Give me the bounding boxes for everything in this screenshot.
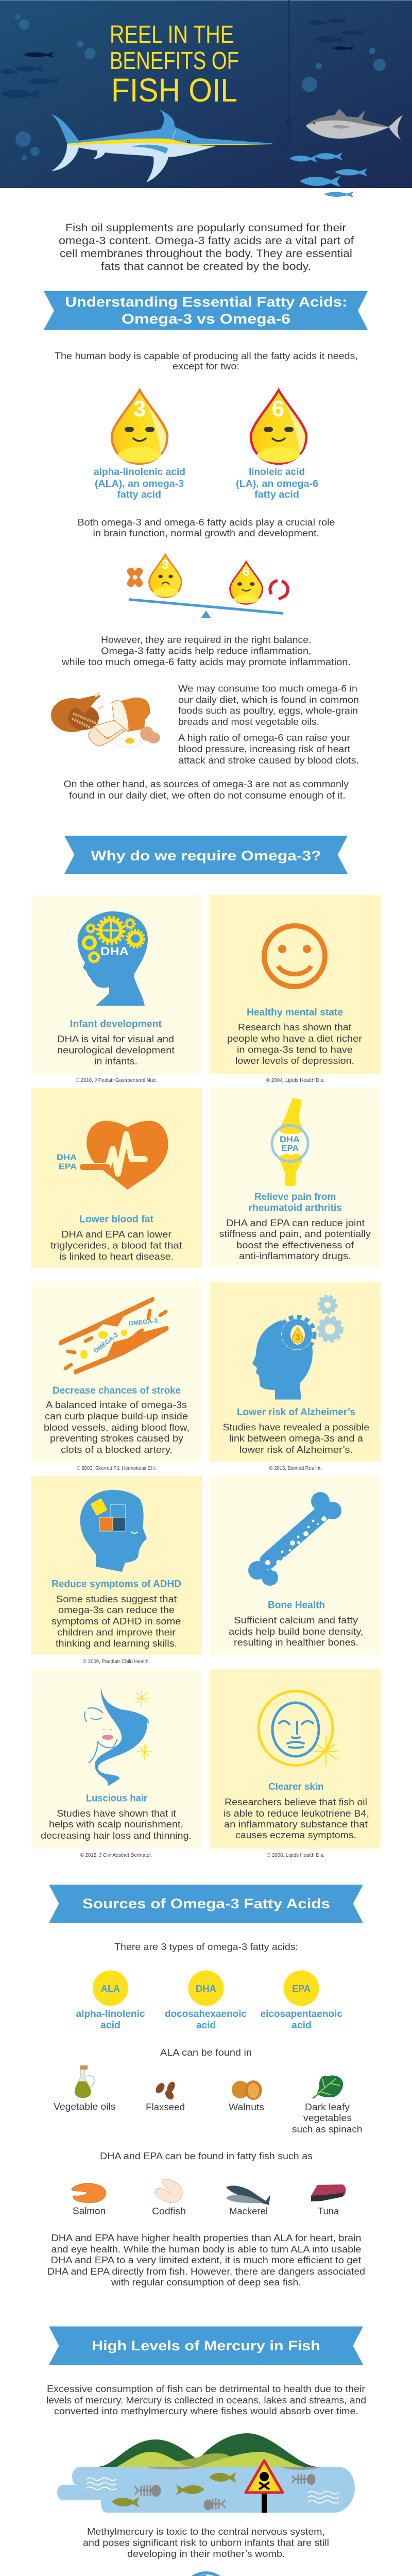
panel: infant development bbox=[31, 895, 202, 1074]
school of dark fish, left bbox=[0, 52, 60, 99]
card text: boost the effectiveness of bbox=[236, 1240, 354, 1250]
text block: DHA and EPA health: and eye health. While the human body is able to turn ALA into usable bbox=[52, 2244, 362, 2255]
icon: inflammation arrows bbox=[270, 581, 288, 599]
card text: helps with scalp nourishment, bbox=[49, 1819, 183, 1829]
card title: Bone Health bbox=[268, 1600, 325, 1611]
text block: methylmercury: developing in their mother’s womb. bbox=[127, 2549, 285, 2559]
text block: methylmercury: Methylmercury is toxic to the central nervous system, bbox=[87, 2527, 325, 2537]
card title: Luscious hair bbox=[86, 1793, 148, 1804]
label: ALA bbox=[94, 467, 185, 500]
title: FISH OIL bbox=[111, 72, 237, 109]
text block: mercury bbox=[46, 2384, 366, 2416]
card text: in omega-3s tend to have bbox=[237, 1045, 353, 1055]
panel: hero banner bbox=[0, 0, 412, 197]
text block: DHA and EPA health: with regular consumption of deep sea fish. bbox=[111, 2277, 301, 2287]
source: salmon: Salmon bbox=[73, 2206, 106, 2216]
text block: 3 types: There are 3 types of omega-3 fatty acids: bbox=[114, 1942, 298, 1952]
card text: thinking and learning skills. bbox=[56, 1638, 177, 1649]
card text: blood vessels, aiding blood flow, bbox=[44, 1422, 190, 1433]
tuna bbox=[306, 109, 403, 140]
card text: Research has shown that bbox=[238, 1022, 351, 1032]
water bbox=[57, 2467, 355, 2513]
source: tuna: Tuna bbox=[318, 2206, 339, 2216]
text block: mercury: Excessive consumption of fish can be detrimental to health due to their bbox=[47, 2384, 365, 2394]
heading: High Levels of Mercury in Fish bbox=[49, 2327, 363, 2365]
DHA type: docosahexaenoic bbox=[165, 2009, 247, 2020]
card text bbox=[224, 1797, 369, 1840]
fulcrum bbox=[201, 611, 211, 618]
card text: DHA and EPA can reduce joint bbox=[226, 1218, 365, 1228]
school of dark fish, right bbox=[308, 18, 364, 50]
text block: DHA and EPA health bbox=[47, 2233, 365, 2287]
card text: in infants. bbox=[94, 1056, 138, 1066]
text block: not enough omega-3: On the other hand, as sources of omega-3 are not as commonly bbox=[64, 779, 349, 789]
text block: not enough omega-3 bbox=[64, 779, 349, 801]
text block: too much omega-6: breads and most vegetable oils. bbox=[178, 717, 319, 727]
waves bbox=[87, 2478, 339, 2503]
icon: smiley bbox=[264, 926, 325, 987]
card text: Researchers believe that fish oil bbox=[225, 1797, 367, 1807]
icon: plaster bbox=[126, 566, 144, 588]
panel: reduce symptoms of ADHD bbox=[31, 1476, 202, 1655]
card text: DHA and EPA can lower bbox=[61, 1229, 171, 1240]
card text: acids help build bone density, bbox=[229, 1626, 364, 1637]
card title: Lower blood fat bbox=[79, 1214, 154, 1225]
card title: Relieve pain from bbox=[254, 1192, 336, 1202]
school of light blue fish bbox=[289, 152, 367, 197]
panel: lower risk of Alzheimer's bbox=[210, 1282, 381, 1462]
panel: clearer skin bbox=[210, 1669, 381, 1849]
hills bbox=[98, 2433, 317, 2467]
text block: DHA and EPA sources: DHA and EPA can be found in fatty fish such as bbox=[100, 2151, 313, 2161]
card text: omega-3s can reduce the bbox=[58, 1605, 175, 1615]
text block: crucial role: Both omega-3 and omega-6 fatty acids play a crucial role bbox=[77, 517, 335, 528]
heading: High Levels of Mercury in Fish: High Levels of Mercury in Fish bbox=[92, 2338, 320, 2353]
fishing hook bbox=[279, 0, 291, 147]
card text: children and improve their bbox=[57, 1627, 176, 1637]
title: BENEFITS OF bbox=[110, 47, 239, 75]
source: salmon bbox=[72, 2183, 106, 2216]
card title: Healthy mental state bbox=[247, 1007, 343, 1018]
chart: balance scale of omega-3 and omega-6 bbox=[126, 554, 288, 618]
heading: Why do we require Omega-3? bbox=[64, 836, 348, 874]
card text: A balanced intake of omega-3s bbox=[46, 1400, 187, 1410]
ALA type: acid bbox=[100, 2020, 121, 2031]
icon: joint bbox=[272, 1098, 308, 1186]
card text bbox=[57, 1034, 175, 1066]
text block: methylmercury: and poses significant risk to unborn infants that are still bbox=[83, 2538, 329, 2548]
panel: lower blood fat bbox=[31, 1088, 202, 1267]
card title: Lower risk of Alzheimer’s bbox=[237, 1407, 355, 1418]
icon: head with puzzle bbox=[80, 1490, 147, 1572]
icon: blood vessel: OMEGA-3 bbox=[128, 1317, 158, 1327]
card text bbox=[219, 1218, 371, 1261]
label: ALA: fatty acid bbox=[117, 489, 161, 500]
fried egg bbox=[116, 738, 142, 747]
icon: head with gears bbox=[252, 1296, 342, 1399]
source: flaxseed: Flaxseed bbox=[146, 2102, 185, 2112]
card title: Infant development bbox=[70, 1019, 162, 1029]
panel: healthy mental state bbox=[210, 895, 381, 1074]
card text: neurological development bbox=[57, 1045, 175, 1055]
EPA type bbox=[261, 1970, 342, 2031]
card text: clots of a blocked artery. bbox=[61, 1445, 173, 1455]
fish skeletons bbox=[135, 2474, 315, 2510]
beam bbox=[129, 598, 283, 615]
text block: methylmercury bbox=[83, 2527, 329, 2559]
text block: crucial role: in brain function, normal growth and development. bbox=[93, 528, 319, 538]
heading: Why do we require Omega-3?: Why do we require Omega-3? bbox=[91, 848, 321, 863]
label: LA: fatty acid bbox=[254, 489, 299, 500]
card text: lower levels of depression. bbox=[235, 1056, 354, 1066]
icon: woman with hair bbox=[84, 1686, 152, 1786]
text block: right balance: while too much omega-6 fatty acids may promote inflammation. bbox=[61, 657, 351, 667]
heading: Understanding Essential Fatty Acids: Omega-3 vs Omega-6 bbox=[122, 311, 290, 327]
card text bbox=[41, 1808, 192, 1841]
label bbox=[57, 1153, 77, 1172]
card text: people who have a diet richer bbox=[227, 1033, 362, 1044]
icon: head with gears: DHA bbox=[100, 945, 129, 958]
DHA type bbox=[165, 1970, 247, 2031]
ALA type: ALA bbox=[101, 1984, 120, 1994]
card text: stiffness and pain, and potentially bbox=[219, 1229, 371, 1239]
text block: mercury: levels of mercury. Mercury is collected in oceans, lakes and streams, and bbox=[46, 2395, 366, 2405]
source: walnuts: Walnuts bbox=[229, 2102, 264, 2112]
panel: rheumatoid arthritis bbox=[210, 1088, 381, 1267]
source: dark leafy vegetables: vegetables bbox=[303, 2113, 352, 2123]
card text bbox=[227, 1022, 362, 1066]
text block: DHA and EPA health: DHA and EPA to a very limited extent, it is much more efficient to get bbox=[50, 2255, 361, 2265]
text block: too much omega-6: We may consume too much omega-6 in bbox=[178, 683, 357, 693]
icon: joint: DHA bbox=[280, 1134, 300, 1144]
card text: Sufficient calcium and fatty bbox=[234, 1615, 358, 1625]
label: LA: linoleic acid bbox=[249, 467, 305, 478]
warning sign bbox=[246, 2461, 283, 2513]
title bbox=[110, 21, 239, 109]
text block: right balance: However, they are required in the right balance. bbox=[101, 635, 311, 645]
title: REEL IN THE bbox=[110, 21, 234, 48]
citation: © 2009, Paediatr Child Health. bbox=[83, 1658, 150, 1665]
icon: omega-3 oil drop: 3 bbox=[133, 396, 146, 421]
text block: two exceptions: The human body is capable of producing all the fatty acids it needs, bbox=[55, 351, 358, 361]
source: dark leafy vegetables bbox=[292, 2075, 363, 2134]
heading: Sources of Omega-3 Fatty Acids bbox=[49, 1885, 363, 1923]
text block: too much omega-6: our daily diet, which is found in common bbox=[178, 694, 359, 705]
text block: intro bbox=[59, 222, 354, 273]
heading: Understanding Essential Fatty Acids bbox=[44, 291, 368, 330]
icon: happy omega-6 drop bbox=[230, 562, 262, 604]
text block: right balance bbox=[61, 635, 351, 667]
icon: omega-3 oil drop bbox=[112, 390, 167, 464]
icon: omega-6 oil drop: 6 bbox=[272, 396, 284, 421]
panel: bone health bbox=[210, 1476, 381, 1655]
bread loaf bbox=[112, 698, 150, 732]
label: LA: (LA), an omega-6 bbox=[236, 479, 318, 489]
illustration: polluted lake bbox=[57, 2433, 355, 2513]
card text: lower risk of Alzheimer’s. bbox=[239, 1445, 353, 1455]
illustration: omega-6 foods bbox=[51, 691, 160, 747]
card text: Studies have revealed a possible bbox=[222, 1422, 369, 1432]
olive fish bbox=[112, 2472, 236, 2507]
citation: © 2012, J Clin Aesthet Dermatol. bbox=[80, 1852, 152, 1858]
text block: too much omega-6: blood pressure, increasing risk of heart bbox=[178, 744, 350, 754]
card text: is linked to heart disease. bbox=[59, 1251, 174, 1262]
source: dark leafy vegetables: such as spinach bbox=[292, 2124, 363, 2134]
source: codfish: Codfish bbox=[152, 2206, 186, 2216]
eggs bbox=[140, 726, 153, 741]
card text bbox=[52, 1594, 181, 1649]
card title: rheumatoid arthritis bbox=[248, 1202, 342, 1214]
card text: resulting in healthier bones. bbox=[234, 1637, 358, 1648]
EPA type: acid bbox=[291, 2020, 312, 2031]
citation: © 2015, Biomed Res Int. bbox=[269, 1465, 322, 1471]
card text bbox=[50, 1229, 182, 1262]
EPA type: eicosapentaenoic bbox=[261, 2009, 342, 2020]
card text: Some studies suggest that bbox=[56, 1594, 177, 1604]
card text: an inflammatory substance that bbox=[224, 1819, 368, 1829]
card text: triglycerides, a blood fat that bbox=[50, 1241, 182, 1251]
text block: not enough omega-3: found in our daily diet, we often do not consume enough of it. bbox=[69, 790, 346, 801]
card text: is able to reduce leukotriene B4, bbox=[224, 1808, 369, 1819]
source: mackerel: Mackerel bbox=[229, 2206, 268, 2216]
icon: happy omega-6 drop: 6 bbox=[243, 565, 250, 579]
label: ALA: (ALA), an omega-3 bbox=[95, 479, 184, 489]
text block: two exceptions bbox=[55, 351, 358, 371]
panel: luscious hair bbox=[31, 1669, 202, 1849]
source: tuna bbox=[311, 2184, 346, 2216]
text block: crucial role bbox=[77, 517, 335, 538]
card text: symptoms of ADHD in some bbox=[52, 1616, 181, 1626]
icon: joint: EPA bbox=[281, 1143, 299, 1153]
icon: blood vessel bbox=[59, 1297, 168, 1375]
card text bbox=[229, 1615, 364, 1648]
icon: bone bbox=[248, 1492, 341, 1586]
card title: Clearer skin bbox=[268, 1782, 323, 1792]
card text: decreasing hair loss and thinning. bbox=[41, 1831, 192, 1841]
source: flaxseed bbox=[146, 2080, 185, 2112]
card title: Decrease chances of stroke bbox=[53, 1385, 181, 1396]
ALA type: alpha-linolenic bbox=[76, 2009, 145, 2020]
text block: too much omega-6 bbox=[178, 683, 359, 766]
label: DHA bbox=[57, 1153, 77, 1162]
card title bbox=[248, 1192, 342, 1214]
citation: © 2010, J Pediatr Gastroenterol Nutr. bbox=[76, 1077, 157, 1083]
icon: heart with pulse bbox=[82, 1121, 168, 1190]
icon: sad omega-3 drop: 3 bbox=[162, 558, 169, 572]
text block: intro: fats that cannot be created by the body. bbox=[101, 261, 311, 273]
heading: Sources of Omega-3 Fatty Acids: Sources of Omega-3 Fatty Acids bbox=[82, 1896, 330, 1911]
card text: Studies have shown that it bbox=[57, 1808, 176, 1819]
icon: blood vessel: OMEGA-3 bbox=[92, 1331, 119, 1354]
DHA type: DHA bbox=[196, 1984, 216, 1994]
DHA type: acid bbox=[196, 2020, 216, 2031]
text block: intro: omega-3 content. Omega-3 fatty acids are a vital part of bbox=[59, 235, 354, 247]
source: codfish bbox=[152, 2179, 186, 2216]
icon: omega-6 oil drop bbox=[251, 390, 306, 464]
icon: head with gears: 3 bbox=[295, 1332, 300, 1342]
text block: intro: Fish oil supplements are popularly consumed for their bbox=[65, 222, 346, 234]
citation: © 2004, Lipids Health Dis. bbox=[266, 1077, 324, 1083]
icon: sad omega-3 drop bbox=[149, 554, 181, 597]
swordfish bbox=[51, 110, 272, 182]
text block: too much omega-6: attack and stroke caused by blood clots. bbox=[178, 755, 359, 766]
source: vegetable oils bbox=[54, 2065, 115, 2112]
text block: DHA and EPA health: DHA and EPA directly from fish. However, there are dangers associated bbox=[47, 2266, 365, 2277]
bubbles bbox=[15, 14, 386, 160]
icon: pregnant woman bbox=[183, 2573, 229, 2576]
text block: too much omega-6: foods such as poultry, eggs, whole-grain bbox=[178, 706, 358, 716]
card text: link between omega-3s and a bbox=[229, 1433, 364, 1444]
text block: mercury: converted into methylmercury where fishes would absorb over time. bbox=[54, 2406, 358, 2416]
source: mackerel bbox=[226, 2185, 270, 2216]
card text bbox=[44, 1400, 190, 1455]
text block: too much omega-6: A high ratio of omega-6 can raise your bbox=[178, 733, 350, 743]
citation: © 2003, Skerrett PJ, Hennekens CH. bbox=[77, 1465, 156, 1471]
icon: face with sparkle bbox=[259, 1691, 338, 1766]
card text: can curb plaque build-up inside bbox=[45, 1411, 188, 1421]
panel: decrease chances of stroke bbox=[31, 1282, 202, 1462]
card text bbox=[222, 1422, 369, 1455]
chicken bbox=[51, 698, 93, 732]
text block: intro: cell membranes throughout the body. They are essential bbox=[60, 248, 352, 260]
text block: ALA can be found in: ALA can be found in bbox=[160, 2047, 252, 2058]
source: vegetable oils: Vegetable oils bbox=[54, 2102, 115, 2112]
card text: preventing strokes caused by bbox=[50, 1433, 183, 1444]
source: dark leafy vegetables: Dark leafy bbox=[305, 2102, 350, 2112]
EPA type: EPA bbox=[292, 1984, 311, 1994]
label: ALA: alpha-linolenic acid bbox=[94, 467, 185, 478]
heading: Understanding Essential Fatty Acids: Understanding Essential Fatty Acids: bbox=[65, 294, 347, 310]
text block: right balance: Omega-3 fatty acids help reduce inflammation, bbox=[101, 646, 311, 656]
label: EPA bbox=[59, 1162, 77, 1172]
text block: DHA and EPA health: DHA and EPA have higher health properties than ALA for heart, brain bbox=[52, 2233, 362, 2243]
icon: head with gears bbox=[77, 911, 148, 1006]
card title: Reduce symptoms of ADHD bbox=[52, 1579, 181, 1590]
text block: two exceptions: except for two: bbox=[173, 361, 239, 371]
card text: anti-inflammatory drugs. bbox=[239, 1251, 351, 1261]
card text: causes eczema symptoms. bbox=[235, 1830, 356, 1840]
source: walnuts bbox=[229, 2080, 264, 2112]
citation: © 2008, Lipids Health Dis. bbox=[267, 1852, 324, 1858]
label: LA bbox=[236, 467, 318, 500]
ALA type bbox=[76, 1970, 145, 2031]
card text: DHA is vital for visual and bbox=[57, 1034, 174, 1044]
